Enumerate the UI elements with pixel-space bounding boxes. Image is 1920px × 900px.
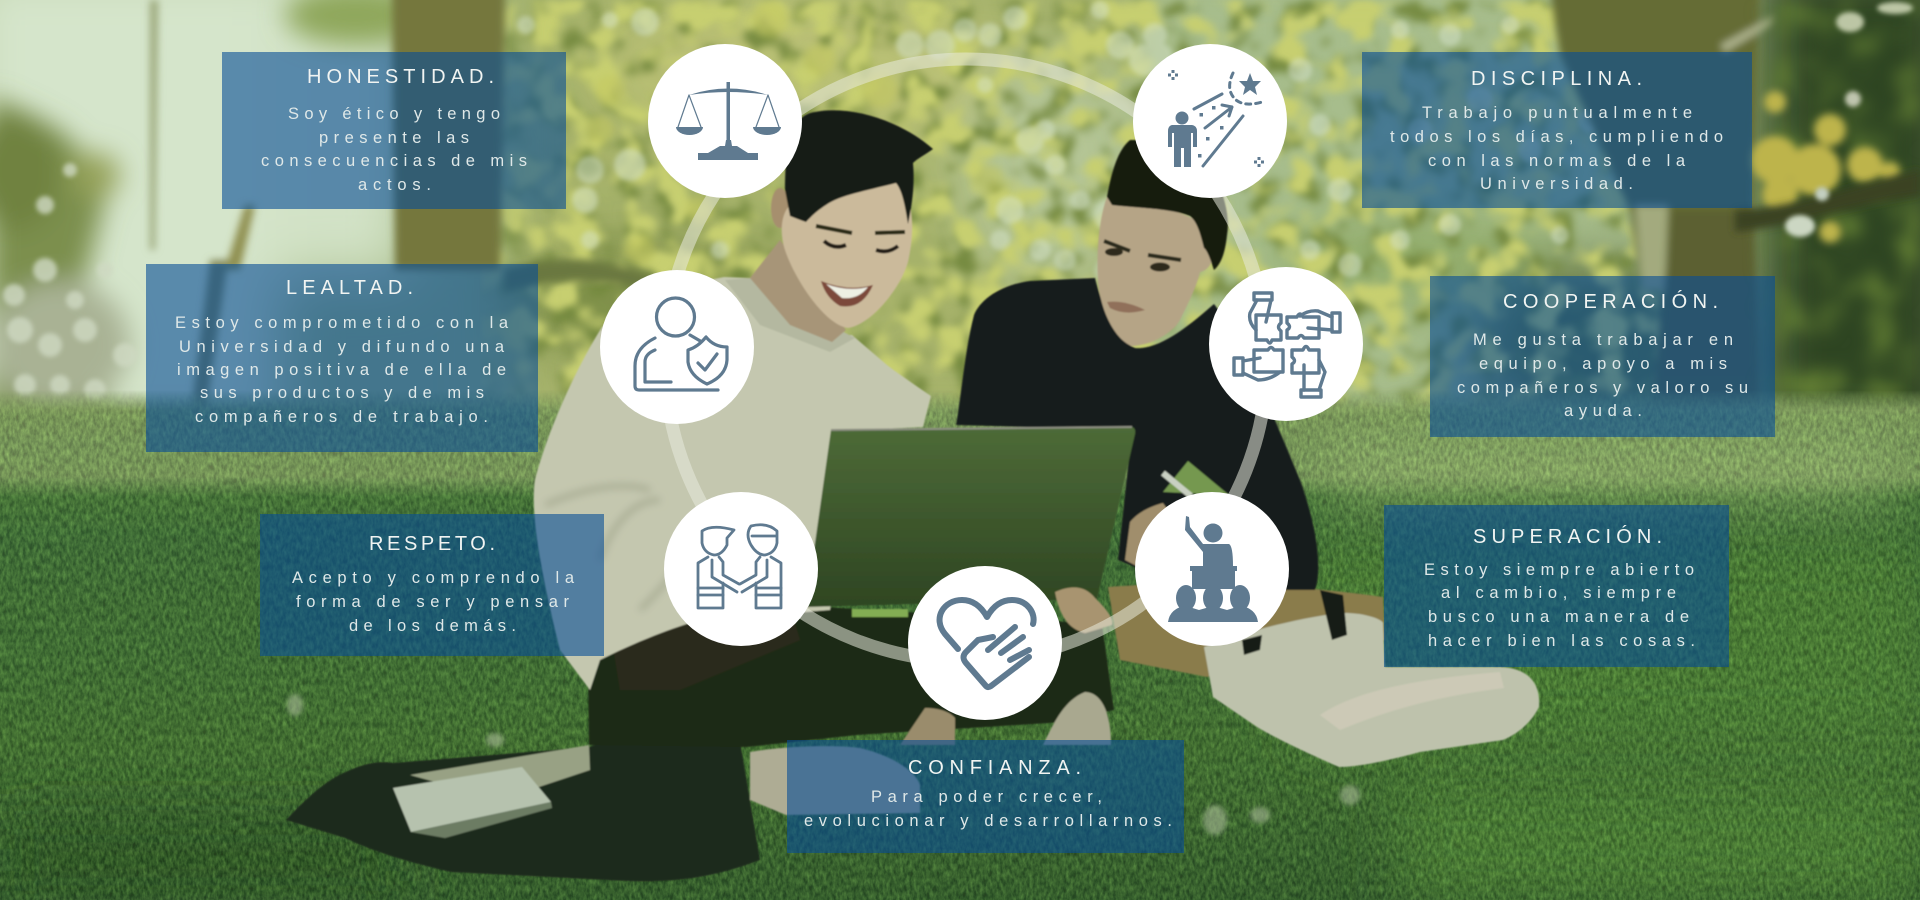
panel: disciplina: DISCIPLINA. [1471,68,1642,90]
panel: honestidad: HONESTIDAD. [307,66,494,88]
grass [0,390,1920,900]
panel: superación: al cambio, siempre [1441,584,1676,602]
panel: superación: busco una manera de [1428,608,1689,626]
left man head [750,110,933,342]
panel: respeto: de los demás. [349,617,516,635]
black backpack and notebook [286,710,760,881]
panel: superación [1384,505,1729,667]
left foliage and bokeh [0,0,425,420]
icon: puzzle hands (cooperación) [1209,267,1363,421]
panel: lealtad: LEALTAD. [286,277,413,299]
panel: cooperación [1430,276,1775,437]
panel: respeto: forma de ser y pensar [296,593,570,611]
panel: cooperación: Me gusta trabajar en [1473,331,1733,349]
clover leaves [287,694,1360,835]
panel: confianza: Para poder crecer, [871,788,1102,806]
laptop [806,427,1135,607]
hand on laptop [1055,587,1112,633]
panel: confianza: CONFIANZA. [908,757,1081,779]
mottled foliage texture [480,0,1700,420]
icon: speaker at podium (superación) [1135,492,1289,646]
panel: lealtad: imagen positiva de ella de [177,361,506,379]
icon: scales (honestidad) [648,44,802,198]
left man legs [588,606,1114,747]
panel: respeto: RESPETO. [369,533,495,555]
panel: lealtad: Universidad y difundo una [179,338,505,356]
panel: lealtad: sus productos y de mis [200,384,484,402]
panel: honestidad: actos. [358,176,431,194]
tree trunks [150,0,1775,420]
icon: person reaching a star (disciplina) [1133,44,1287,198]
panel: disciplina: Trabajo puntualmente [1422,104,1692,122]
panel: honestidad [222,52,566,209]
panel: lealtad [146,264,538,452]
panel: disciplina: todos los días, cumpliendo [1390,128,1723,146]
panel: cooperación: compañeros y valoro su [1457,379,1748,397]
panel: superación: hacer bien las cosas. [1428,632,1695,650]
panel: superación: SUPERACIÓN. [1473,525,1662,548]
panel: honestidad: consecuencias de mis [261,152,527,170]
panel: lealtad: compañeros de trabajo. [195,408,488,426]
panel: confianza: evolucionar y desarrollarnos. [804,812,1172,830]
panel: disciplina: con las normas de la [1428,152,1686,170]
panel: honestidad: presente las [319,129,469,147]
right man [956,140,1318,590]
shoes [750,692,1111,815]
people, laptop and backpacks [286,110,1539,881]
icon: heart and hand (confianza) [908,566,1062,720]
panel: lealtad: Estoy comprometido con la [175,314,509,332]
panel: cooperación: equipo, apoyo a mis [1479,355,1727,373]
right man trousers and beige backpack [1108,584,1539,767]
panel: confianza [787,740,1184,853]
panel: disciplina: Universidad. [1480,175,1633,193]
blurred tree canopy [0,0,1920,480]
panel: cooperación: COOPERACIÓN. [1503,290,1718,313]
panel: respeto [260,514,604,656]
panel: superación: Estoy siempre abierto [1424,561,1694,579]
ring connecting the values [665,59,1267,661]
dark foliage on the right [1735,0,1920,450]
panel: cooperación: ayuda. [1564,402,1642,420]
icon: handshake (respeto) [664,492,818,646]
left man sweater [534,277,931,690]
bokeh spots in the canopy [517,1,1602,330]
icon: person with shield (lealtad) [600,270,754,424]
panel: honestidad: Soy ético y tengo [288,105,500,123]
panel: disciplina [1362,52,1752,208]
panel: respeto: Acepto y comprendo la [292,569,575,587]
